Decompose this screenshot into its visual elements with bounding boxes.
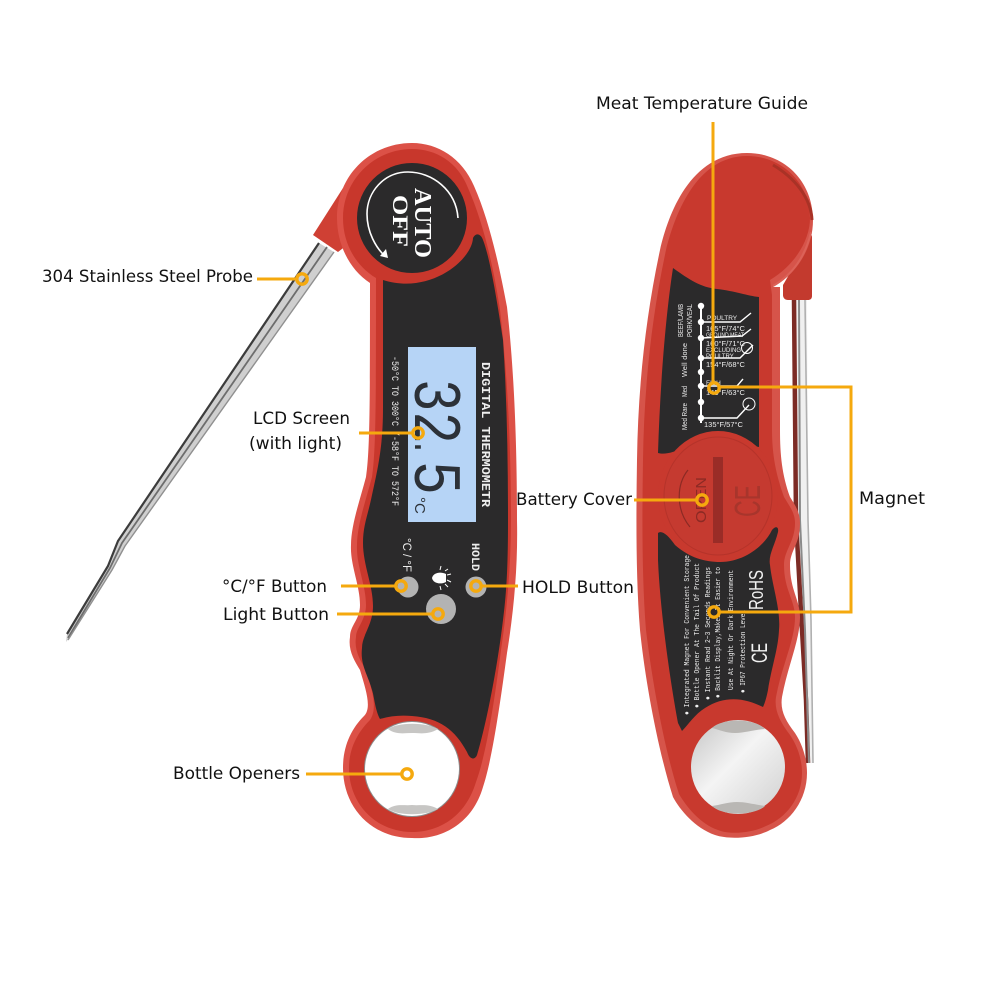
meat temperature guide: Med Rare bbox=[680, 403, 689, 430]
temperature range text: -50°C TO 300°C /-58°F TO 572°F bbox=[388, 356, 400, 506]
label: battery cover: Battery Cover bbox=[516, 490, 632, 509]
meat temperature guide: PORK/VEAL bbox=[687, 304, 694, 337]
bottle opener hole bbox=[364, 721, 460, 817]
label: LCD screen: (with light) bbox=[249, 434, 342, 453]
feature list bbox=[684, 555, 748, 715]
red body bbox=[337, 143, 517, 838]
CE mark: CE bbox=[747, 643, 772, 663]
icon: light bulb bbox=[432, 566, 451, 590]
meat temperature guide: 160°F/71°C bbox=[706, 339, 746, 348]
meat temperature guide: 145°F/63°C bbox=[706, 388, 746, 397]
feature list: ● Instant Read 2~3 Seconds Readings bbox=[705, 567, 713, 700]
label: hold button bbox=[471, 578, 634, 597]
meat temperature guide: Well done bbox=[680, 343, 689, 377]
feature list: ● Integrated Magnet For Convenient Storage bbox=[684, 555, 692, 715]
LCD screen: . bbox=[402, 438, 447, 456]
C/F button bbox=[398, 538, 418, 598]
label: hold button: HOLD Button bbox=[522, 578, 634, 597]
meat temperature guide: EXCLUDING bbox=[706, 348, 741, 354]
right thermometer bbox=[636, 153, 813, 838]
back lower black panel bbox=[658, 527, 779, 731]
C/F button: °C / °F bbox=[400, 538, 414, 572]
auto off dial: OFF bbox=[388, 195, 413, 247]
red body bbox=[636, 153, 813, 838]
battery cover: CE bbox=[727, 485, 768, 517]
meat temperature guide: POULTRY bbox=[707, 315, 738, 322]
HOLD button bbox=[466, 543, 486, 598]
label: battery cover bbox=[516, 490, 707, 509]
back bottle opener bbox=[691, 720, 785, 814]
meat temperature guide bbox=[678, 303, 755, 430]
meat temperature guide: FISH bbox=[706, 380, 721, 387]
battery cover: OPEN bbox=[693, 477, 710, 523]
label: light button bbox=[223, 605, 443, 624]
HOLD button: HOLD bbox=[468, 543, 480, 571]
LCD screen bbox=[394, 347, 476, 522]
label: stainless steel probe: 304 Stainless Steel Probe bbox=[42, 267, 253, 286]
RoHS mark: RoHS bbox=[746, 570, 768, 610]
label: magnet bbox=[709, 387, 926, 617]
battery cover bbox=[658, 431, 778, 561]
meat temperature guide: BEEF/LAMB bbox=[678, 304, 685, 337]
label: bottle openers bbox=[173, 764, 412, 783]
LCD screen: 5 bbox=[394, 461, 471, 495]
label: C/F button bbox=[222, 577, 406, 596]
meat temperature guide: POULTRY bbox=[706, 354, 734, 360]
meat temperature guide: 165°F/74°C bbox=[706, 324, 746, 333]
probe hinge bbox=[313, 188, 360, 252]
feature list: ● Bottle Opener At The Tail Of Product bbox=[694, 563, 702, 708]
auto off dial: AUTO bbox=[409, 188, 435, 258]
feature list: ● IP67 Protection Level bbox=[740, 610, 748, 693]
label: LCD screen bbox=[249, 409, 423, 453]
left thermometer bbox=[313, 143, 517, 838]
black face panel bbox=[362, 234, 508, 758]
label: LCD screen: LCD Screen bbox=[253, 409, 350, 428]
light button bbox=[426, 594, 456, 624]
auto off dial bbox=[357, 163, 467, 273]
meat temperature guide: 135°F/57°C bbox=[704, 420, 744, 429]
label: C/F button: °C/°F Button bbox=[222, 577, 327, 596]
label: magnet: Magnet bbox=[859, 489, 926, 508]
meat temperature guide: Med bbox=[680, 386, 689, 397]
digital thermometer text: DIGITAL THERMOMETR bbox=[478, 362, 492, 508]
feature list: Use At Night Or Dark Environment bbox=[728, 570, 736, 690]
label: meat temperature guide: Meat Temperature Guide bbox=[596, 94, 808, 113]
feature list: ● Backlit Display,Makes It Easier to bbox=[715, 567, 723, 698]
right probe bbox=[792, 300, 813, 763]
LCD screen: °C bbox=[411, 497, 428, 514]
LCD screen: 32 bbox=[394, 379, 471, 444]
label: light button: Light Button bbox=[223, 605, 329, 624]
label: bottle openers: Bottle Openers bbox=[173, 764, 300, 783]
left probe bbox=[66, 243, 334, 642]
back upper black panel bbox=[658, 268, 759, 454]
label: meat temperature guide bbox=[596, 94, 808, 393]
meat temperature guide: 154°F/68°C bbox=[706, 360, 746, 369]
probe hinge bbox=[783, 235, 812, 300]
meat temperature guide: GROUND MEAT bbox=[706, 332, 744, 339]
